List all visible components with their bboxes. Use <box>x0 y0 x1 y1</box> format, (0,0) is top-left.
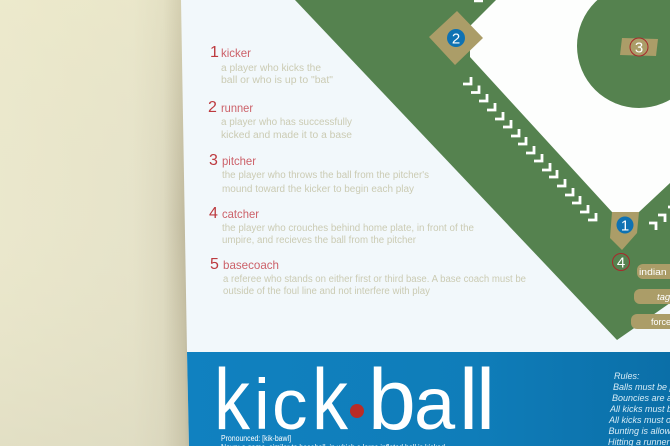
legend item 4: catcher: umpire, and recieves the ball from the pitcher <box>222 235 417 246</box>
legend item 5: basecoach: basecoach <box>223 258 279 272</box>
title: kick ball: b <box>368 352 416 446</box>
catcher marker <box>612 254 630 272</box>
legend item 3: pitcher: the player who throws the ball from the pitcher's <box>222 170 429 181</box>
legend item 4: catcher <box>209 205 474 246</box>
title: kick ball: a <box>414 362 456 445</box>
title: kick ball <box>218 366 490 430</box>
pronunciation and definition <box>222 435 445 446</box>
home plate <box>610 212 639 250</box>
title: kick ball: l <box>476 352 495 446</box>
pitcher's mound marker: 3 <box>635 40 643 56</box>
legend item 2: runner: runner <box>221 101 253 115</box>
second base <box>429 11 483 65</box>
chevrons: home to first <box>649 207 670 230</box>
legend item 3: pitcher: 3 <box>209 152 218 169</box>
title red dot <box>350 404 364 418</box>
pitcher's mound marker <box>620 38 658 56</box>
title: kick ball: c <box>272 366 308 445</box>
title: kick ball: k <box>312 352 349 446</box>
legend item 2: runner: a player who has successfully <box>221 117 352 128</box>
panel: poster sheet <box>181 0 670 446</box>
legend item 1: kicker <box>210 44 333 86</box>
pronunciation and definition: Pronounced: [kik-bawl] <box>221 433 291 443</box>
catcher marker: 4 <box>617 254 625 272</box>
panel: kickball field <box>295 0 670 340</box>
pitcher's circle <box>577 0 670 108</box>
legend item 1: kicker: ball or who is up to "bat" <box>221 75 333 86</box>
legend item 4: catcher: catcher <box>222 207 259 221</box>
legend item 5: basecoach <box>210 256 526 297</box>
pill: indian rubber: indian r <box>639 267 670 278</box>
legend item 1: kicker: a player who kicks the <box>221 63 321 74</box>
legend: player definitions <box>208 44 526 297</box>
pill: force <box>631 314 670 329</box>
background: paper surface <box>0 0 190 446</box>
second base: 2 <box>452 30 460 48</box>
legend item 5: basecoach: outside of the foul line and not interfere with play <box>223 286 430 297</box>
rules list: Rules: <box>614 371 640 381</box>
title: kick ball: l <box>459 352 478 446</box>
legend item 3: pitcher <box>209 152 429 195</box>
pill: tag <box>634 289 670 304</box>
legend item 2: runner: 2 <box>208 99 217 116</box>
field: green diamond <box>295 0 670 340</box>
title: kick ball: k <box>214 352 251 446</box>
legend item 3: pitcher: mound toward the kicker to begin each play <box>222 184 414 195</box>
title: kick ball: i <box>254 366 270 445</box>
legend item 4: catcher: 4 <box>209 205 218 222</box>
legend item 3: pitcher: pitcher <box>222 154 256 168</box>
legend item 1: kicker: kicker <box>221 46 251 60</box>
legend item 2: runner: kicked and made it to a base <box>221 130 352 141</box>
chevrons: top of field <box>474 0 483 2</box>
field: white infield <box>470 0 670 212</box>
pill: indian rubber <box>637 264 670 279</box>
legend item 5: basecoach: 5 <box>210 256 219 273</box>
legend item 4: catcher: the player who crouches behind home plate, in front of the <box>222 223 474 234</box>
legend item 5: basecoach: a referee who stands on either first or third base. A base coach must be <box>223 274 526 285</box>
legend item 1: kicker: 1 <box>210 44 219 61</box>
panel: blue title band <box>180 352 670 446</box>
home plate: 1 <box>621 218 629 234</box>
pill: tag: tag <box>657 292 670 303</box>
rules list <box>608 371 670 446</box>
legend item 2: runner <box>208 99 352 141</box>
chevrons: base path to home <box>463 77 596 220</box>
